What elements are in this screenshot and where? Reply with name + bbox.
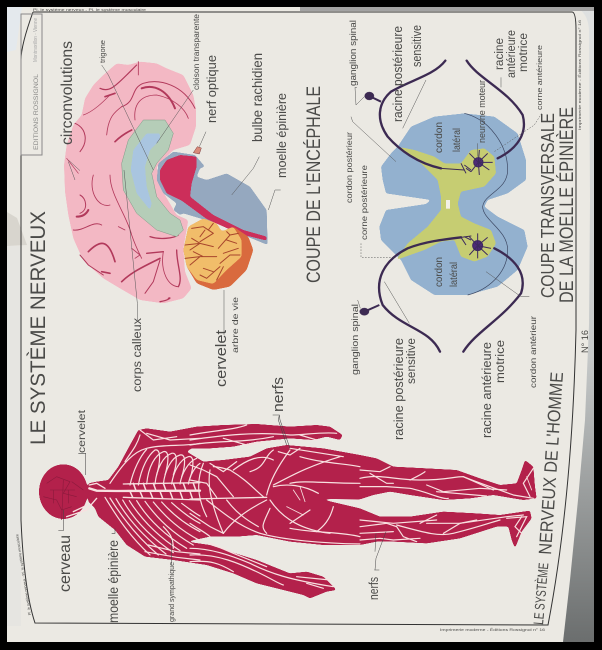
illustration: human nervous system bbox=[39, 415, 537, 598]
brain labels: circonvolutions bbox=[59, 41, 76, 145]
heading: human nervous system: NERVEUX DE L'HOMME bbox=[535, 371, 567, 555]
spinal cord labels: neurone moteur bbox=[477, 80, 488, 143]
brain labels: trigone bbox=[98, 40, 107, 63]
spinal cord labels: ganglion spinal bbox=[348, 20, 358, 86]
body labels: cerveau bbox=[57, 535, 74, 592]
body labels: moelle épinière bbox=[106, 540, 121, 623]
brain labels: nerf optique bbox=[205, 55, 219, 123]
brain labels: cloison transparente bbox=[192, 13, 201, 90]
spinal cord labels: motrice bbox=[518, 33, 530, 72]
left strip caption: Pl. le système nerveux - Pl. le système musculaire bbox=[15, 534, 32, 615]
spinal cord labels: corne postérieure bbox=[360, 164, 369, 240]
heading: human nervous system bbox=[530, 371, 567, 625]
body labels bbox=[57, 377, 381, 623]
upper torso nerves bbox=[67, 430, 200, 560]
spinal cord labels: racine antérieure bbox=[479, 342, 494, 438]
midbrain bbox=[160, 155, 267, 241]
spinal cord labels: ganglion spinal bbox=[350, 304, 360, 375]
brain leader lines bbox=[68, 65, 281, 335]
illustration: spinal cord cross-section bbox=[351, 61, 542, 352]
main title: LE SYSTÈME NERVEUX bbox=[27, 211, 50, 445]
brain folds bbox=[43, 477, 83, 520]
upper motor neuron bbox=[461, 150, 493, 175]
bottom strip caption: Imprimerie moderne - Éditions Rossignol n° 16 bbox=[440, 627, 545, 632]
grey matter bbox=[396, 147, 496, 262]
heading: human nervous system: LE SYSTÈME bbox=[530, 562, 551, 625]
body labels: grand sympathique bbox=[169, 562, 176, 622]
anterior boundary line bbox=[464, 113, 508, 295]
body silhouette bbox=[39, 424, 537, 598]
spinal cord labels: antérieure bbox=[506, 30, 518, 78]
cerebellum inner bbox=[183, 218, 242, 284]
body labels: nerfs bbox=[270, 377, 287, 412]
cerebellum outer bbox=[183, 218, 253, 290]
spinal cord labels: cordon bbox=[434, 122, 445, 153]
spinal cord labels: sensitive bbox=[406, 338, 418, 384]
corpus callosum bbox=[122, 120, 183, 237]
brain labels: bulbe rachidien bbox=[250, 53, 265, 142]
brain cortex bbox=[64, 62, 196, 303]
central canal bbox=[446, 200, 450, 209]
right strip caption: Imprimerie moderne - Éditions Rossignol n° 16 bbox=[577, 20, 582, 130]
spinal cord labels bbox=[345, 20, 544, 440]
brain labels: corps calleux bbox=[132, 318, 144, 392]
ventricle bbox=[131, 133, 160, 210]
medulla bbox=[157, 152, 268, 245]
spinal cord labels: sensitive bbox=[410, 25, 424, 67]
brain labels: arbre de vie bbox=[231, 296, 240, 353]
publisher box: Montmorillon - Vienne bbox=[33, 18, 39, 62]
body labels: cervelet bbox=[76, 410, 88, 453]
tree of life bbox=[185, 223, 240, 280]
number: N° 16 bbox=[580, 330, 590, 353]
spinal cord labels: racine bbox=[494, 38, 506, 70]
spinal cord labels: cordon bbox=[434, 257, 445, 287]
body leader lines bbox=[58, 415, 386, 570]
lower torso, pelvis and arm nerves bbox=[190, 425, 360, 588]
spinal cord labels: cordon antérieur bbox=[529, 316, 538, 388]
brain labels: moelle épinière bbox=[275, 93, 289, 178]
spinal cord labels: latéral bbox=[449, 262, 460, 287]
spinal cord labels: corne antérieure bbox=[535, 45, 544, 110]
top strip caption: Pl. le système nerveux - Pl. le système musculaire bbox=[33, 7, 147, 12]
brain labels bbox=[59, 13, 289, 392]
spinal cord labels: racine postérieure bbox=[391, 26, 405, 122]
brain labels: cervelet bbox=[214, 330, 230, 387]
spinal cord labels: racine postérieure bbox=[391, 338, 406, 440]
white matter bbox=[379, 113, 528, 295]
spinal cord labels: latéral bbox=[452, 128, 463, 152]
heading: spinal cord section: DE LA MOELLE ÉPINIÈRE bbox=[557, 107, 578, 303]
nerves bbox=[67, 425, 533, 588]
lower motor neuron bbox=[461, 233, 491, 258]
heading: spinal cord section: COUPE TRANSVERSALE bbox=[538, 113, 558, 298]
cord leader lines bbox=[351, 77, 542, 323]
optic nerve bbox=[193, 147, 201, 154]
publisher box bbox=[21, 14, 42, 155]
cortex sulci bbox=[67, 62, 195, 302]
spinal ganglia bbox=[360, 92, 381, 315]
nerve roots bbox=[379, 61, 524, 352]
spinal cord labels: cordon postérieur bbox=[345, 132, 354, 203]
heading: spinal cord section bbox=[538, 107, 578, 303]
illustration: brain section bbox=[64, 62, 281, 335]
spinal cord labels: motrice bbox=[495, 340, 507, 383]
body labels: nerfs bbox=[366, 577, 381, 600]
leg nerves bbox=[360, 467, 533, 542]
heading: brain section: COUPE DE L'ENCÉPHALE bbox=[304, 86, 325, 283]
publisher box: EDITIONS ROSSIGNOL bbox=[33, 74, 40, 150]
